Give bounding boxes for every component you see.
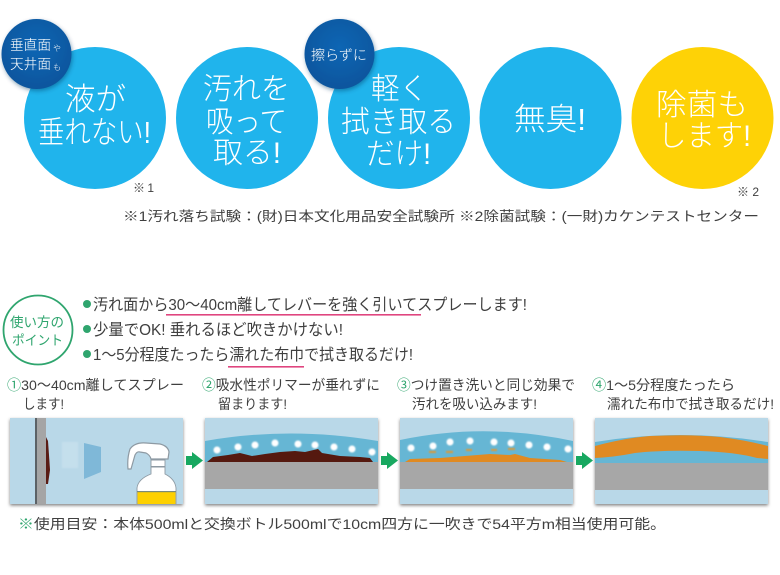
feature circle: 無臭: 無臭! — [514, 102, 586, 137]
feature circle: 液が垂れない: 液が — [65, 82, 126, 117]
absorbed dirt band — [595, 435, 768, 459]
arrow 2 — [381, 452, 398, 469]
usage points badge: ポイント — [12, 333, 63, 348]
test institutions note: ※1汚れ落ち試験：(財)日本文化用品安全試験所 ※2除菌試験：(一財)カケンテストセンター — [123, 209, 759, 224]
feature circle: 汚れを吸って取る: 汚れを — [203, 73, 290, 106]
badge: 垂直面や天井面も: も — [53, 63, 61, 72]
feature circle: 液が垂れない: 垂れない! — [38, 115, 151, 150]
feature circle: 軽く拭き取るだけ: だけ! — [366, 138, 431, 171]
panel: step 2 polymer holds — [205, 418, 378, 504]
badge: 垂直面や天井面も: 天井面 — [10, 56, 51, 72]
step 2 caption: ②吸水性ポリマーが垂れずに — [202, 377, 380, 393]
step 1 caption: します! — [23, 396, 64, 412]
dissolved dirt — [405, 454, 567, 462]
step 3 caption — [397, 377, 575, 412]
feature circle: 除菌もします: します! — [658, 120, 751, 153]
feature circle: 汚れを吸って取る: 吸って — [206, 106, 287, 139]
panel: step 3 soaking up dirt — [400, 418, 573, 504]
feature circle: 軽く拭き取るだけ: 拭き取る — [341, 106, 456, 139]
footnote mark 2: ※2 — [737, 185, 759, 199]
feature circle: 汚れを吸って取る: 取る! — [213, 137, 281, 170]
step 4 caption — [592, 377, 774, 412]
feature circle: 軽く拭き取るだけ — [328, 47, 470, 189]
usage points list — [83, 296, 527, 368]
point 3: 1〜5分程度たったら濡れた布巾で拭き取るだけ! — [93, 346, 413, 364]
step 2 caption — [202, 377, 380, 412]
arrow 1 — [186, 452, 203, 469]
dirt on wall — [46, 437, 50, 484]
step 4 caption: ④1〜5分程度たったら — [592, 377, 735, 393]
feature circle: 汚れを吸って取る — [176, 47, 318, 189]
polymer dots — [214, 440, 376, 456]
feature circle: 液が垂れない — [24, 47, 166, 189]
feature circle: 除菌もします: 除菌も — [656, 89, 748, 122]
wall section — [35, 418, 46, 504]
badge: 垂直面や天井面も: 垂直面 — [10, 37, 51, 53]
badge: 垂直面や天井面も — [2, 19, 72, 89]
gray surface — [205, 462, 378, 489]
step 1 caption — [7, 377, 184, 412]
step 3 caption: ③つけ置き洗いと同じ効果で — [397, 377, 575, 393]
badge: 垂直面や天井面も: や — [53, 44, 61, 53]
feature circle: 無臭 — [480, 47, 622, 189]
panel: step 4 wipe off — [595, 418, 768, 504]
step 3 caption: 汚れを吸い込みます! — [412, 396, 537, 412]
point 2: 少量でOK! 垂れるほど吹きかけない! — [93, 321, 343, 339]
icon: spray bottle — [128, 443, 176, 504]
badge: 擦らずに — [304, 19, 374, 89]
step 1 caption: ①30〜40cm離してスプレー — [7, 377, 184, 393]
step 4 caption: 濡れた布巾で拭き取るだけ! — [607, 396, 774, 412]
arrow 3 — [576, 452, 593, 469]
feature circle: 除菌もします — [632, 47, 774, 189]
polymer layer — [205, 434, 378, 464]
usage estimate note: ※使用目安：本体500mlと交換ボトル500mlで10cm四方に一吹きで54平方m相当使用可能。 — [18, 516, 666, 532]
point 1: 汚れ面から30〜40cm離してレバーを強く引いてスプレーします! — [93, 296, 527, 314]
dirt layer — [207, 449, 373, 462]
panel: step 1 spraying — [10, 418, 183, 504]
floating dirt bits — [429, 448, 515, 453]
usage points badge: 使い方の — [10, 314, 64, 330]
footnote mark 1: ※1 — [133, 181, 154, 195]
gray surface — [595, 463, 768, 490]
spray mist — [62, 442, 101, 479]
polymer dots — [408, 438, 572, 452]
badge: 擦らずに: 擦らずに — [311, 47, 367, 63]
polymer layer — [400, 431, 573, 464]
usage points badge — [4, 296, 72, 364]
feature circle: 軽く拭き取るだけ: 軽く — [371, 73, 428, 106]
step 2 caption: 留まります! — [218, 396, 287, 412]
gray surface — [400, 462, 573, 489]
polymer layer — [595, 435, 768, 464]
